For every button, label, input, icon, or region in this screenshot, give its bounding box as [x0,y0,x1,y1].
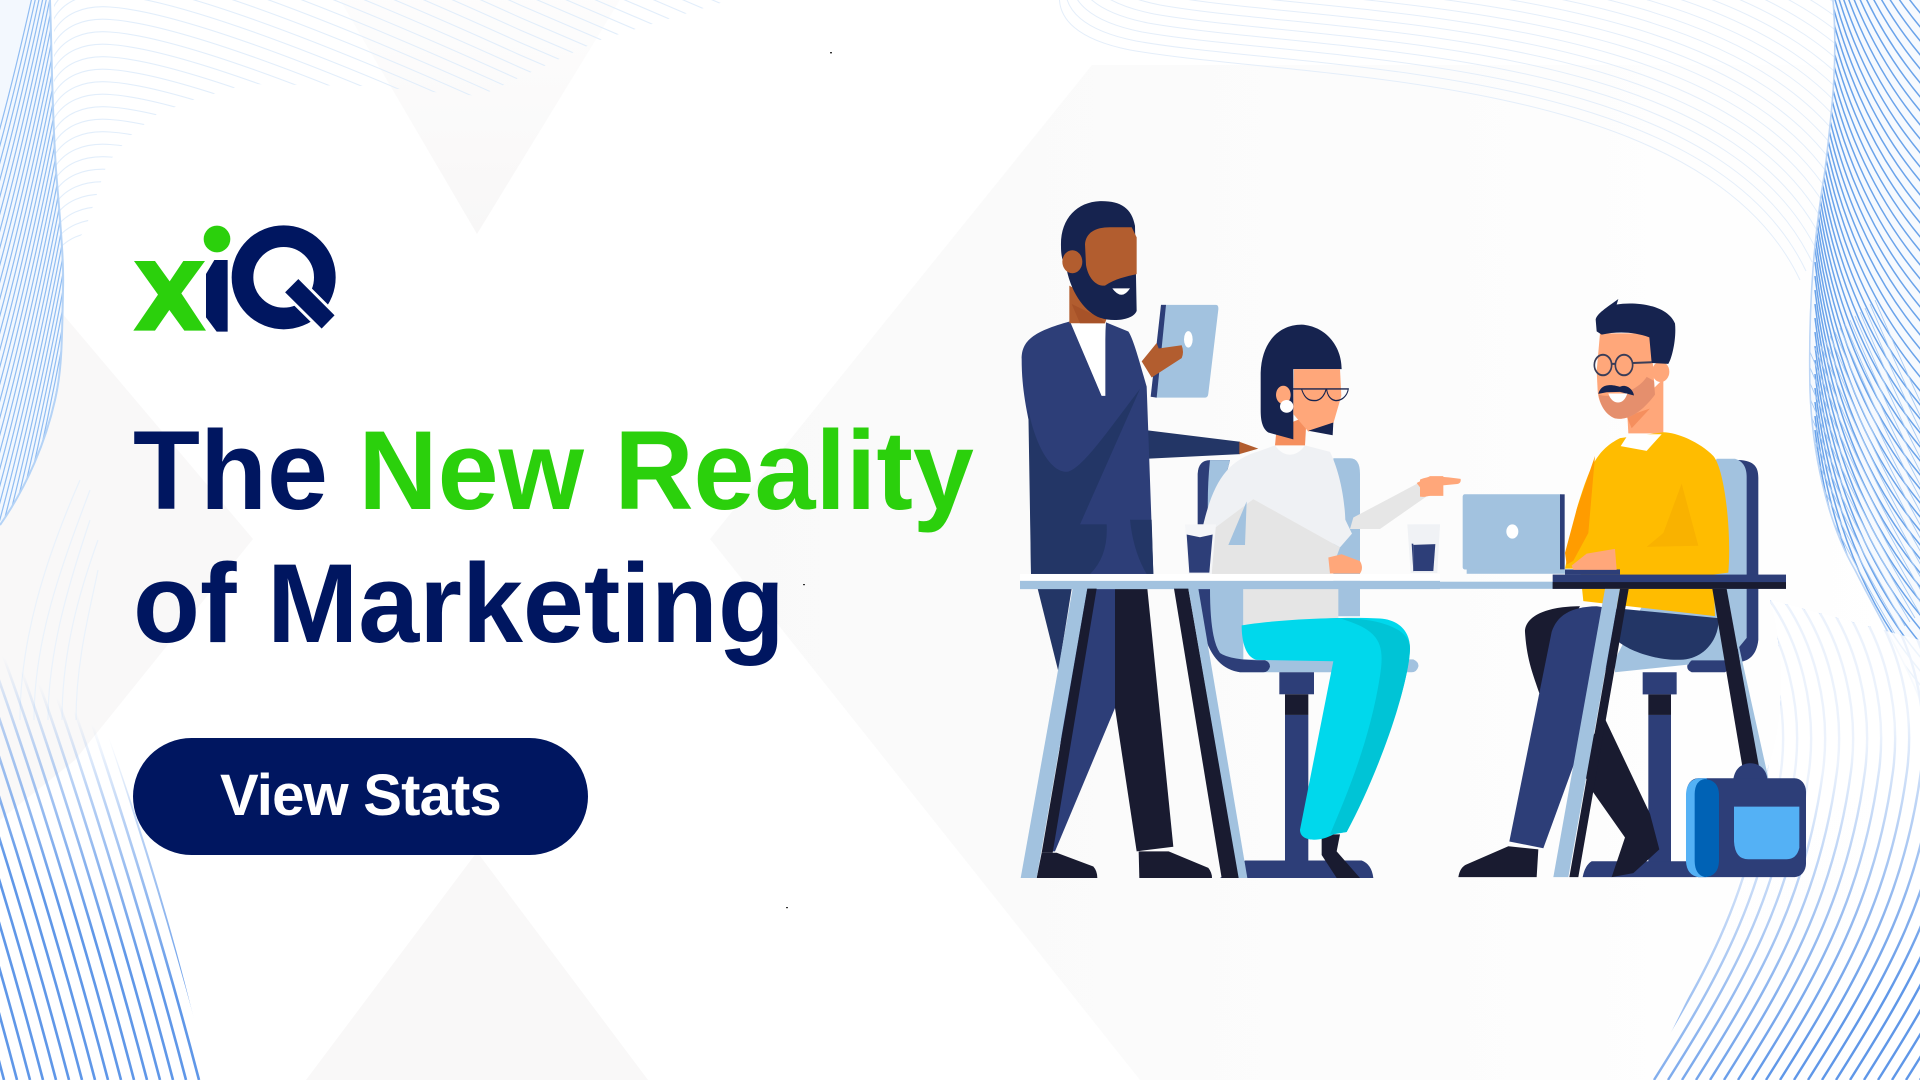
man legs [1037,589,1212,878]
laptop [1463,494,1620,575]
small specks [786,52,832,908]
desk legs right [1553,589,1768,877]
title: The New Reality [133,408,974,533]
bottom-left line stripes [0,668,200,1080]
top-left pale arcs [54,0,720,246]
person: seated man, laptop and bag [1413,299,1806,877]
back leg [1458,606,1659,877]
woman head [1261,325,1348,445]
title: of Marketing [133,541,785,666]
person: standing man and left desk [1020,201,1443,878]
man torso [1022,321,1258,574]
man head [1061,201,1137,323]
woman shirt and arm [1203,445,1443,625]
bottom-right line stripes [1653,600,1920,1080]
chair seat and stem: woman [1198,458,1418,878]
top-right pale arcs [1059,0,1920,280]
woman legs [1242,618,1410,878]
pointing hand [1420,477,1461,497]
trousers [1509,606,1718,848]
right wave ribbon [1810,0,1920,686]
left-side pale vertical lines [20,480,98,720]
bag [1686,763,1806,877]
desk legs left [1021,589,1247,878]
glasses on desk [1185,524,1440,574]
sweater [1565,432,1729,616]
chair [1583,459,1758,877]
man neck and head [1594,299,1675,433]
right ribbon edge [1810,0,1920,700]
button: view stats: View Stats [220,763,501,828]
desk top right [1420,575,1786,589]
desk glass right [1413,524,1440,572]
desk top left [1020,574,1440,589]
top-left ribbon edge [0,0,63,525]
tablet [1142,305,1218,398]
button: view stats [133,738,588,855]
title [133,408,974,666]
top-left wave ribbon [0,0,62,522]
